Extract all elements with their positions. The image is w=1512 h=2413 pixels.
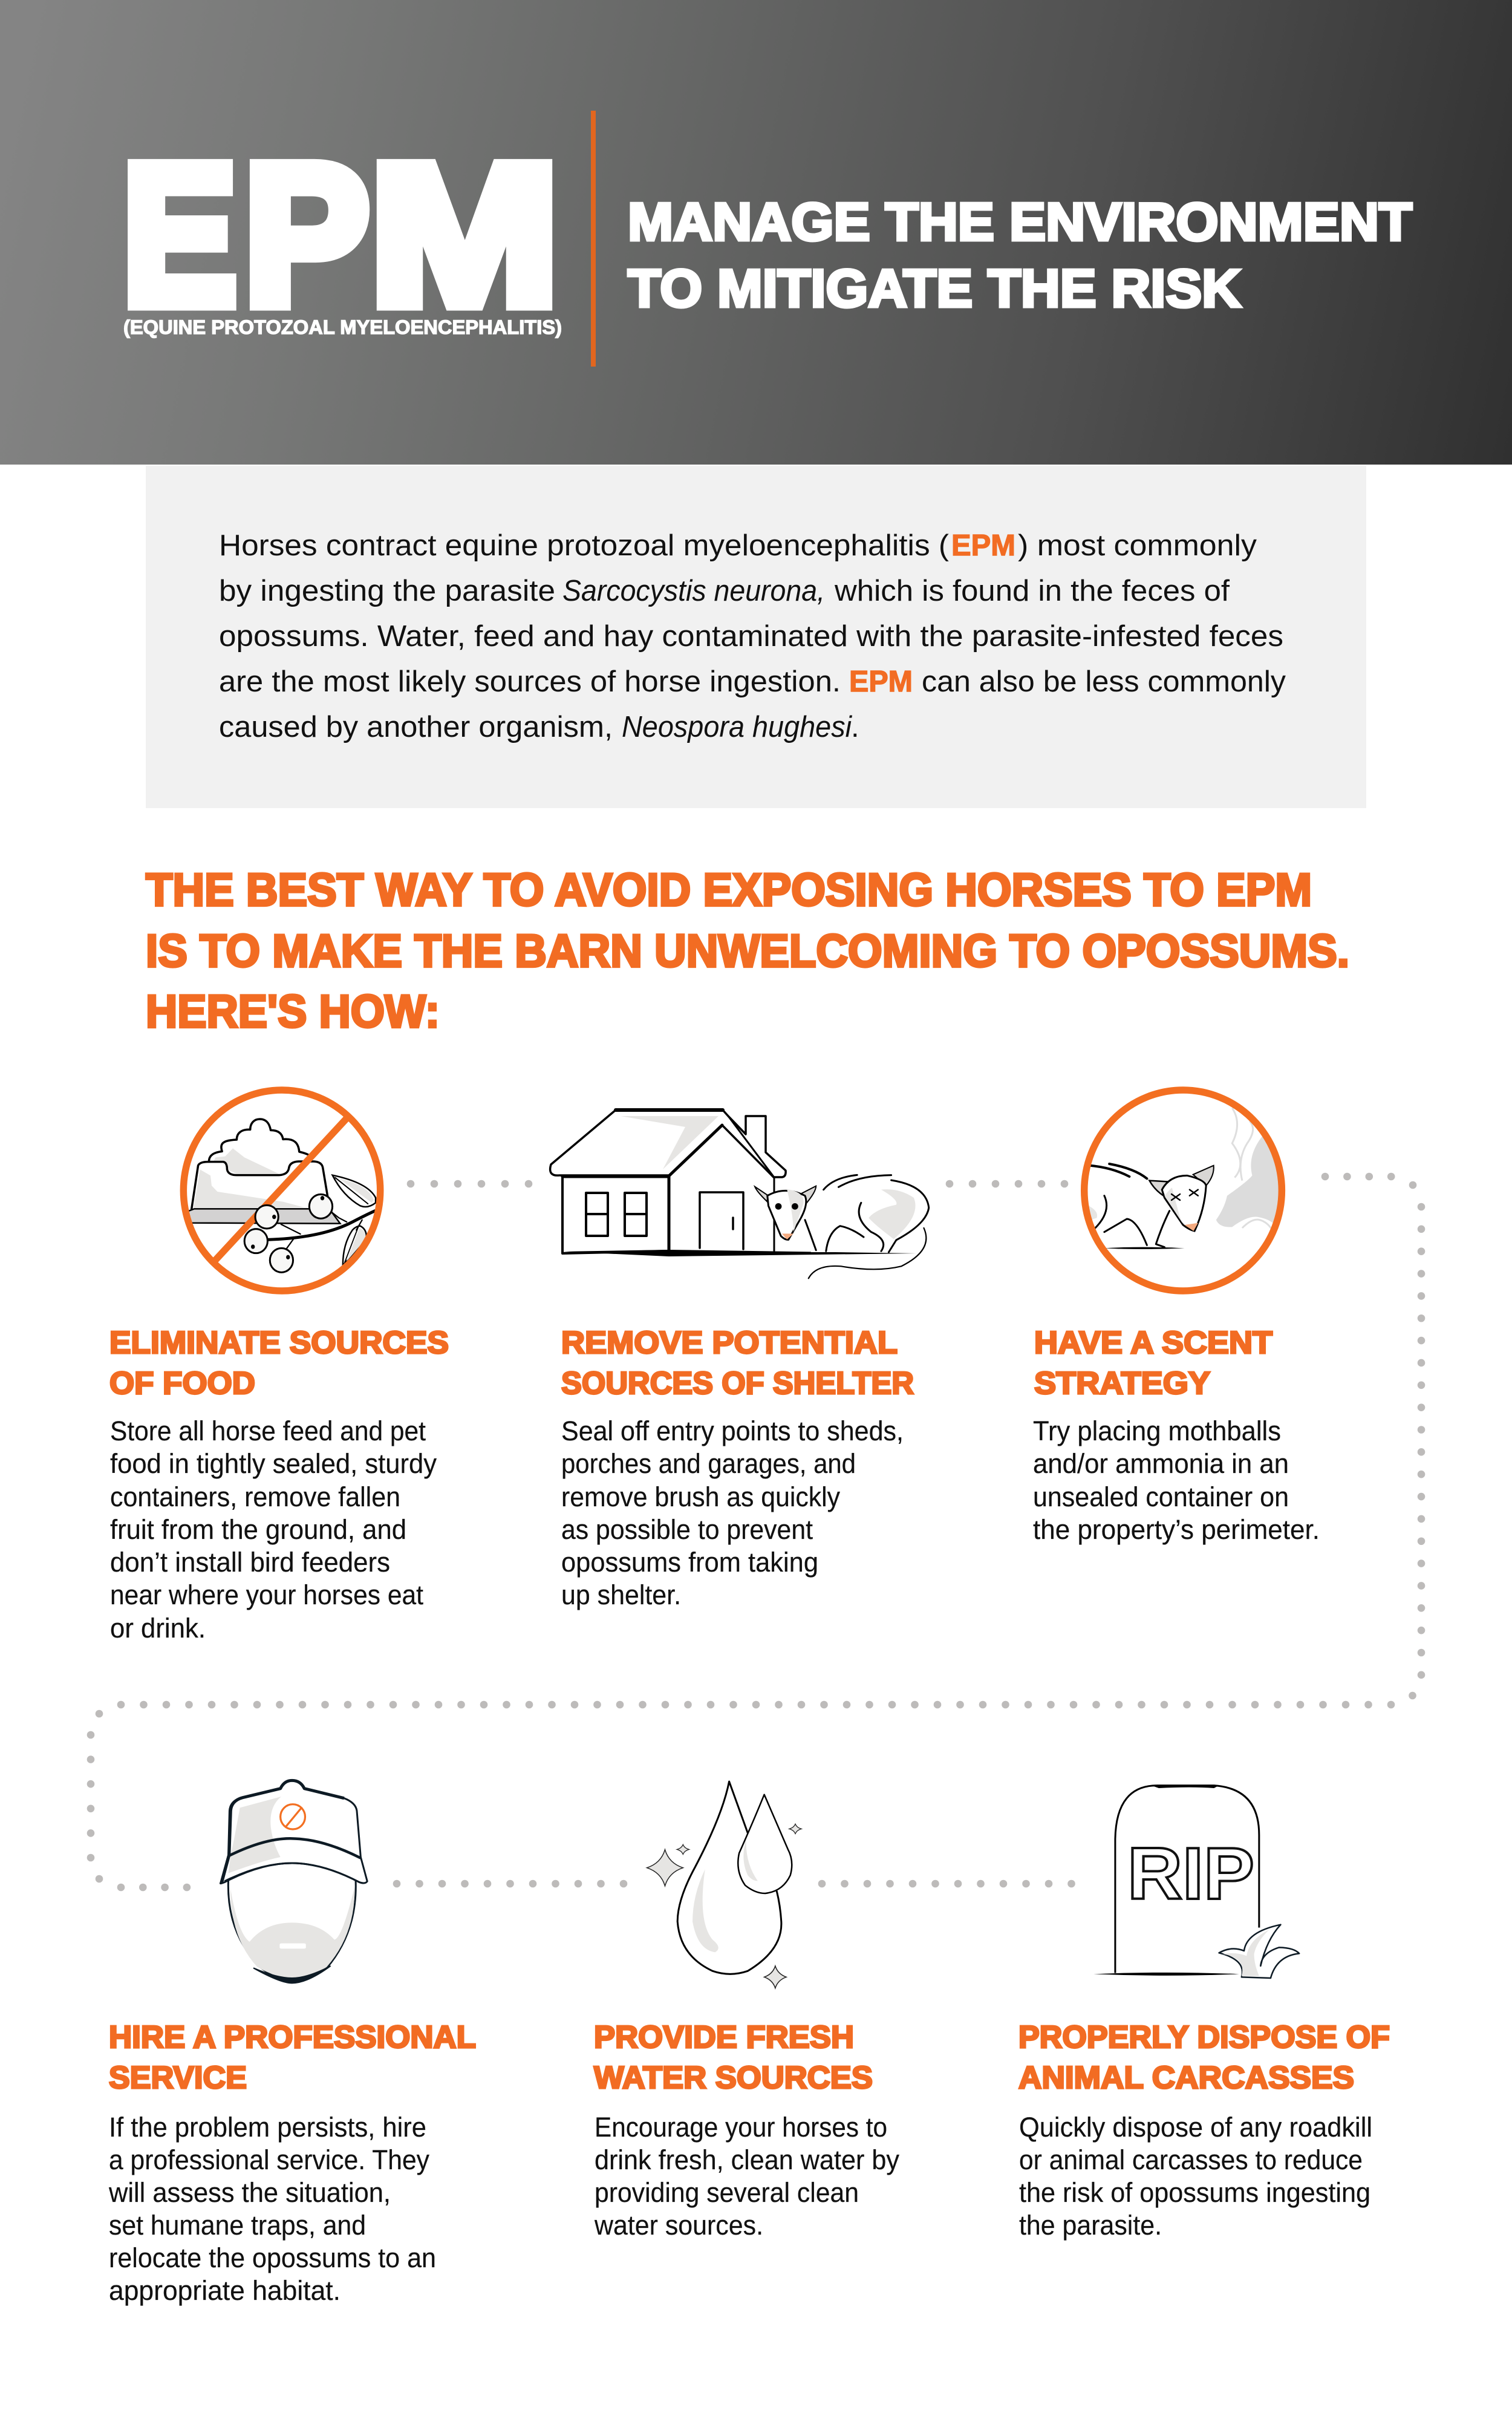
heading <box>109 1325 449 1401</box>
icon: no food, feed bag and berries in crossed circle <box>183 1090 380 1291</box>
heading: ELIMINATE SOURCES <box>109 1325 449 1360</box>
heading: OF FOOD <box>109 1366 255 1401</box>
opossum <box>755 1175 929 1278</box>
subtitle: full disease name: (EQUINE PROTOZOAL MYELOENCEPHALITIS) <box>123 316 562 338</box>
text block: introduction copy: . <box>851 711 859 743</box>
heading <box>1034 1325 1272 1401</box>
heading: best way to avoid exposure: THE BEST WAY TO AVOID EXPOSING HORSES TO EPM <box>146 864 1312 916</box>
text block: introduction copy: opossums. Water, feed and hay contaminated with the parasite-infested feces <box>219 620 1283 653</box>
text block: introduction copy: by ingesting the parasite <box>219 575 555 607</box>
divider: orange vertical rule <box>591 111 596 367</box>
title: EPM <box>123 123 559 345</box>
heading: best way to avoid exposure: IS TO MAKE THE BARN UNWELCOMING TO OPOSSUMS. <box>146 926 1349 977</box>
text block <box>110 1415 437 1644</box>
text block: food in tightly sealed, sturdy <box>110 1448 437 1479</box>
heading: manage the environment: TO MITIGATE THE RISK <box>628 258 1241 318</box>
heading: SERVICE <box>109 2060 247 2095</box>
text block: introduction copy: ) most commonly <box>1018 529 1257 562</box>
step 1: eliminate sources of food <box>109 1325 449 1644</box>
text block: introduction copy: Horses contract equine protozoal myeloencephalitis ( <box>219 529 950 562</box>
text block <box>594 2112 899 2241</box>
icon: scent strategy, opossum and vapour in circle <box>1084 1090 1290 1291</box>
text block <box>561 1415 904 1610</box>
icon: RIP gravestone with grass <box>1093 1784 1299 1978</box>
text block: the risk of opossums ingesting <box>1019 2177 1370 2208</box>
connector: dotted path through all six steps <box>91 1177 1421 1887</box>
text block: fruit from the ground, and <box>110 1514 406 1545</box>
text block: opossums from taking <box>561 1547 818 1578</box>
text block: don’t install bird feeders <box>110 1547 390 1578</box>
heading: HAVE A SCENT <box>1034 1325 1272 1360</box>
text block: introduction copy: Sarcocystis neurona, <box>562 575 825 607</box>
text block: introduction copy: caused by another organism, <box>219 711 613 743</box>
text block: introduction copy <box>219 529 1286 743</box>
text block: Encourage your horses to <box>595 2112 887 2143</box>
text block: and/or ammonia in an <box>1033 1448 1289 1479</box>
ground line <box>562 1250 916 1256</box>
text block: near where your horses eat <box>110 1579 423 1610</box>
text block: Store all horse feed and pet <box>110 1415 426 1446</box>
text block: introduction copy: are the most likely sources of horse ingestion. <box>219 665 841 698</box>
text block: introduction copy: EPM <box>951 529 1015 562</box>
text block <box>108 2112 436 2306</box>
text block: introduction copy: Neospora hughesi <box>622 711 852 743</box>
heading: PROPERLY DISPOSE OF <box>1018 2020 1390 2055</box>
text block: Seal off entry points to sheds, <box>561 1415 904 1446</box>
text block: or drink. <box>110 1613 206 1644</box>
text block: drink fresh, clean water by <box>595 2144 899 2175</box>
text block: appropriate habitat. <box>109 2275 341 2306</box>
text block: containers, remove fallen <box>110 1481 400 1512</box>
heading: WATER SOURCES <box>594 2060 873 2095</box>
text block: water sources. <box>594 2210 763 2241</box>
text block: remove brush as quickly <box>561 1481 840 1512</box>
heading: REMOVE POTENTIAL <box>561 1325 898 1360</box>
title: EPM: E <box>123 123 236 345</box>
text block <box>1019 2112 1372 2241</box>
heading <box>109 2020 476 2095</box>
text block: relocate the opossums to an <box>109 2242 436 2273</box>
heading <box>594 2020 873 2095</box>
text block: or animal carcasses to reduce <box>1019 2144 1363 2175</box>
text block: set humane traps, and <box>109 2210 366 2241</box>
text block: as possible to prevent <box>561 1514 813 1545</box>
text block: porches and garages, and <box>561 1448 856 1479</box>
text block: unsealed container on <box>1033 1481 1289 1512</box>
heading: SOURCES OF SHELTER <box>561 1366 914 1401</box>
step 4: hire a professional service <box>108 2020 476 2306</box>
text block: introduction copy: EPM <box>849 665 913 698</box>
heading: best way to avoid exposure <box>146 864 1349 1037</box>
text block: will assess the situation, <box>108 2177 391 2208</box>
gravestone lettering: RIP <box>1127 1832 1254 1915</box>
text block: up shelter. <box>561 1579 681 1610</box>
text block: Quickly dispose of any roadkill <box>1019 2112 1372 2143</box>
title: EPM: P <box>244 123 369 345</box>
heading: STRATEGY <box>1034 1366 1210 1401</box>
heading: best way to avoid exposure: HERE'S HOW: <box>146 986 440 1037</box>
panel: header banner <box>0 0 1512 465</box>
icon: water drops with sparkles <box>647 1781 801 1988</box>
text block: introduction copy: which is found in the feces of <box>834 575 1230 607</box>
text block: providing several clean <box>595 2177 859 2208</box>
step 6: properly dispose of animal carcasses <box>1018 2020 1390 2241</box>
title: EPM: M <box>370 123 559 345</box>
heading: PROVIDE FRESH <box>594 2020 854 2055</box>
icon: house with opossum <box>550 1110 929 1278</box>
heading: HIRE A PROFESSIONAL <box>109 2020 476 2055</box>
text block: the property’s perimeter. <box>1033 1514 1320 1545</box>
panel: introduction <box>146 466 1366 808</box>
text block: a professional service. They <box>109 2144 429 2175</box>
step 3: have a scent strategy <box>1033 1325 1320 1545</box>
text block: Try placing mothballs <box>1033 1415 1281 1446</box>
step 5: provide fresh water sources <box>594 2020 899 2241</box>
heading <box>1018 2020 1390 2095</box>
step 2: remove potential sources of shelter <box>561 1325 914 1610</box>
heading: ANIMAL CARCASSES <box>1018 2060 1354 2095</box>
text block <box>1033 1415 1320 1545</box>
text block: If the problem persists, hire <box>109 2112 426 2143</box>
heading: manage the environment <box>628 192 1412 318</box>
icon: professional in a cap <box>220 1780 367 1983</box>
heading <box>561 1325 914 1401</box>
heading: manage the environment: MANAGE THE ENVIRONMENT <box>628 192 1412 252</box>
text block: the parasite. <box>1019 2210 1162 2241</box>
text block: introduction copy: can also be less commonly <box>922 665 1286 698</box>
house <box>550 1110 786 1253</box>
